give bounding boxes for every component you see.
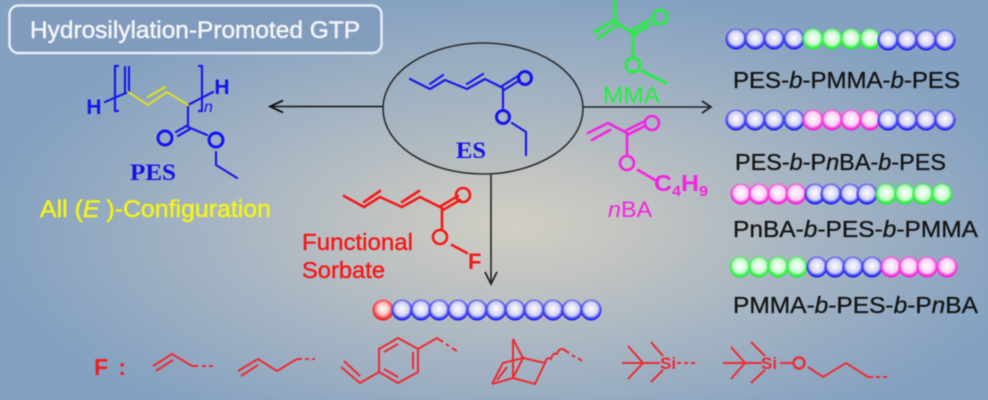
- arrow: ES to PES: [270, 100, 383, 112]
- chain: end-functionalized polymer: [372, 300, 602, 320]
- molecule: functional sorbate: [344, 188, 481, 274]
- arrow: ES to functional polymer: [485, 174, 497, 284]
- label: F group key: F :: [94, 354, 126, 380]
- F group: butenyl: [238, 359, 315, 376]
- F group: TBS ether propyl: [723, 342, 887, 383]
- label: PnBA-b-PES-b-PMMA: PnBA-b-PES-b-PMMA: [733, 216, 979, 242]
- ES ellipse with monomer: [383, 43, 583, 174]
- molecule: MMA: MMA: [603, 82, 661, 108]
- F group: TBS ether propyl: Si: [761, 354, 777, 373]
- molecule: PES polymer: n: [204, 99, 213, 116]
- molecule: nBA: C: [654, 170, 671, 196]
- molecule: nBA: H: [681, 170, 699, 196]
- title badge: Hydrosilylation-Promoted GTP: [30, 17, 360, 44]
- title badge: [10, 6, 382, 53]
- molecule: PES polymer: H: [86, 96, 102, 119]
- molecule: nBA: 9: [699, 183, 708, 200]
- F group: allyl: [153, 354, 213, 371]
- label: PES: PES: [130, 160, 176, 185]
- F group: vinylbenzyl: [341, 338, 457, 383]
- chain: PES-b-PnBA-b-PES: [726, 110, 956, 130]
- ES ellipse with monomer: ES: [456, 138, 486, 163]
- label: all E configuration: All (E )-Configuration: [40, 196, 271, 223]
- molecule: PES polymer: [86, 66, 237, 178]
- label: PES-b-PnBA-b-PES: PES-b-PnBA-b-PES: [735, 149, 946, 175]
- molecule: functional sorbate: F: [468, 249, 481, 274]
- molecule: MMA: [594, 0, 667, 108]
- molecule: nBA: [588, 116, 708, 222]
- F group: norbornene: [492, 339, 582, 384]
- chain: PnBA-b-PES-b-PMMA: [730, 184, 952, 204]
- label: functional sorbate: [302, 229, 413, 283]
- molecule: PES polymer: H: [214, 76, 230, 99]
- label: PMMA-b-PES-b-PnBA: PMMA-b-PES-b-PnBA: [733, 292, 979, 318]
- F group: TBS dotted: [622, 342, 695, 382]
- chain: PES-b-PMMA-b-PES: [726, 28, 956, 50]
- label: PES-b-PMMA-b-PES: PES-b-PMMA-b-PES: [733, 67, 960, 93]
- molecule: nBA: nBA: [608, 197, 652, 222]
- label: functional sorbate: Functional: [302, 229, 413, 255]
- label: functional sorbate: Sorbate: [302, 257, 385, 283]
- chain: PMMA-b-PES-b-PnBA: [730, 256, 958, 278]
- F group: TBS dotted: Si: [660, 354, 676, 373]
- molecule: nBA: 4: [672, 183, 682, 200]
- arrow: ES to block copolymers: [583, 101, 711, 113]
